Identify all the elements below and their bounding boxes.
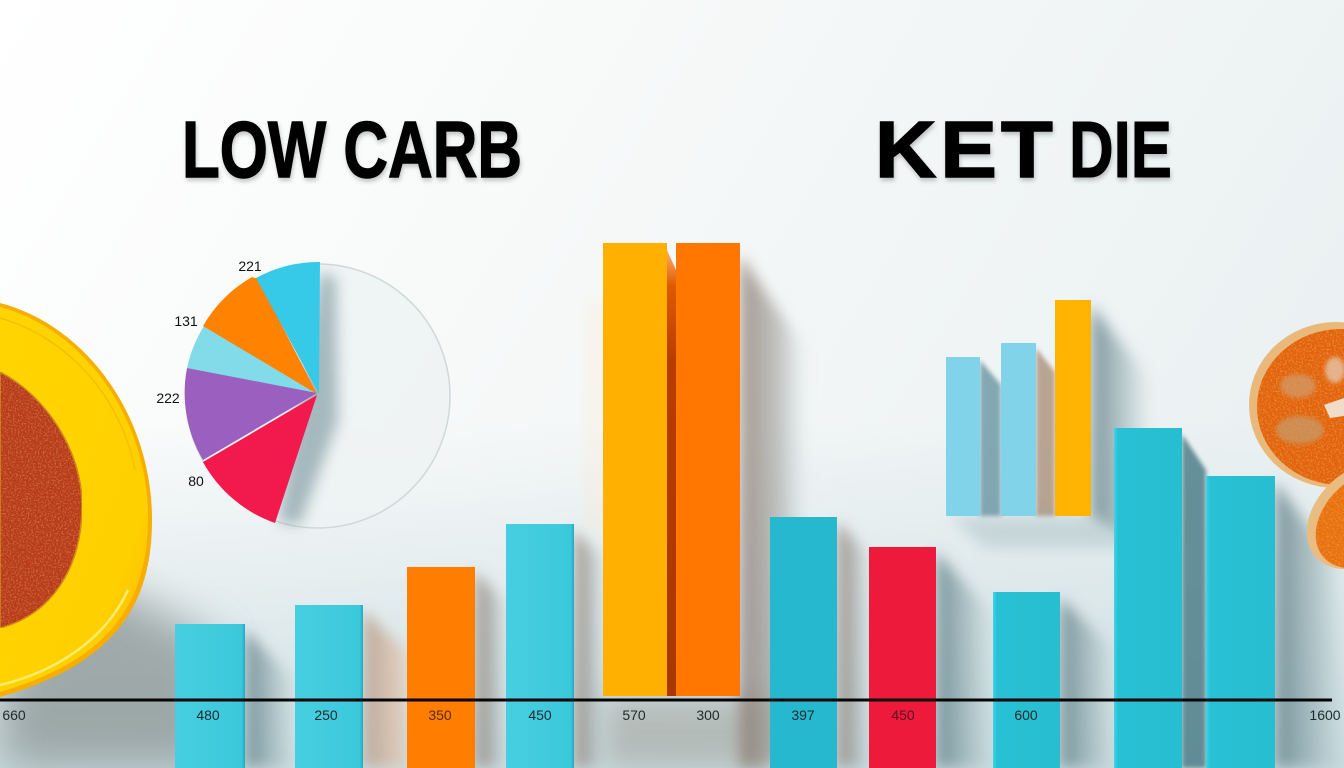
tall bar 300 — [676, 243, 740, 696]
label 300: 300 — [696, 707, 720, 723]
label 1600: 1600 — [1309, 707, 1341, 723]
plate body — [0, 307, 148, 692]
gap shadow between tall bars — [667, 250, 676, 696]
pie inner shadow — [278, 272, 338, 525]
bar shadows — [0, 255, 1344, 768]
bar 480 — [175, 624, 245, 768]
plate highlight — [0, 590, 128, 685]
slice one — [1249, 322, 1344, 488]
bar chart — [175, 243, 1275, 768]
bar 450 red — [869, 547, 936, 768]
label 570: 570 — [622, 707, 646, 723]
pie slice: light blue — [187, 326, 317, 394]
pie base disc — [186, 264, 450, 528]
label 397: 397 — [791, 707, 815, 723]
yellow plate with food — [0, 303, 152, 697]
pie slice: red — [203, 395, 317, 523]
bar right — [1206, 476, 1275, 768]
plate rim — [0, 303, 152, 697]
title: low carb: LOW CARB — [182, 105, 522, 194]
title: keto diet: DIE — [1069, 105, 1172, 194]
bar 450 — [506, 524, 574, 768]
slice two — [1285, 439, 1344, 591]
pie label 80: 80 — [188, 473, 204, 489]
title: keto diet — [875, 105, 1172, 194]
small bar one — [946, 357, 980, 516]
bar 600 — [993, 592, 1060, 768]
pie slice: purple — [185, 368, 317, 460]
label 450 red: 450 — [891, 707, 915, 723]
pie label 221: 221 — [238, 258, 262, 274]
label 660: 660 — [2, 707, 26, 723]
pie label 222: 222 — [156, 390, 180, 406]
label 350: 350 — [428, 707, 452, 723]
label 600: 600 — [1014, 707, 1038, 723]
food — [0, 372, 82, 628]
plate inner ridge — [0, 318, 135, 470]
label 250: 250 — [314, 707, 338, 723]
label 450: 450 — [528, 707, 552, 723]
sliced food right — [1249, 322, 1344, 591]
bar 397 — [770, 517, 837, 768]
title: keto diet: KET — [875, 105, 1057, 194]
small bar two — [1001, 343, 1036, 516]
pie slice: orange — [203, 277, 317, 394]
tall bar 570 — [603, 243, 667, 696]
pie chart — [156, 258, 450, 528]
bar tall right — [1114, 428, 1182, 768]
small bar three — [1055, 300, 1091, 516]
pie label 131: 131 — [174, 313, 198, 329]
axis labels — [2, 707, 1341, 723]
pie slice: cyan — [256, 262, 320, 394]
bar 250 — [295, 605, 363, 768]
bar 350 — [407, 567, 475, 768]
axis line — [0, 698, 1332, 702]
warm glow beside orange bars — [586, 300, 603, 530]
label 480: 480 — [196, 707, 220, 723]
